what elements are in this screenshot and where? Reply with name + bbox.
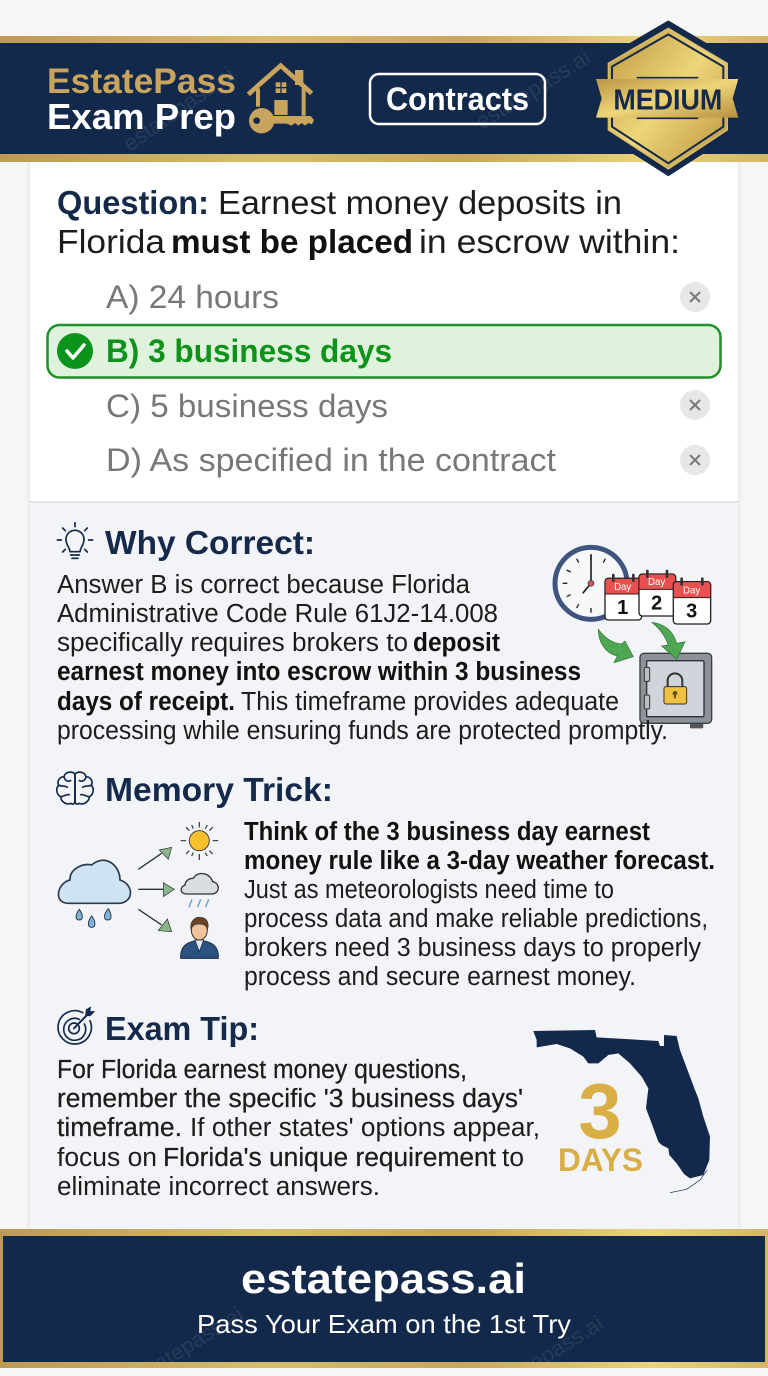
difficulty badge: MEDIUM [596,22,738,174]
question text [57,184,680,260]
icon: calendar day 3: 3 [686,600,697,622]
option C: C) 5 business days [106,388,388,424]
icon: calendar day 3: Day [683,585,700,596]
option A [106,279,710,315]
icon: calendar day 3 [673,579,711,624]
icon: businessman [181,917,218,958]
icon: brain [57,772,93,804]
text block: memory trick: Just as meteorologists need time to [244,876,614,904]
icon: calendar day 2: Day [648,577,665,588]
callout: 3 days [558,1067,643,1178]
icon: clock [555,547,627,619]
footer banner [0,1229,768,1376]
text block: why correct: processing while ensuring funds are protected promptly. [57,717,668,745]
text block: why correct: This timeframe provides adequate [241,688,619,716]
text block: why correct: days of receipt. [57,688,235,716]
text block: memory trick: money rule like a 3-day weather forecast. [244,847,715,875]
header banner: estatepass.ai [119,61,239,156]
text block: why correct: Administrative Code Rule 61J2-14.008 [57,600,498,628]
text block: exam tip: Florida's unique requirement [163,1144,496,1172]
text block: memory trick: process and secure earnest money. [244,963,636,991]
arrow: to person [138,909,172,932]
option D: D) As specified in the contract [106,442,556,478]
icon: calendar day 1 [605,575,642,620]
icon: sun [181,822,218,860]
icon: rain cloud [58,860,130,927]
icon: safe with padlock [640,653,712,728]
question text: in escrow within: [419,223,680,260]
arrow: to sun [138,847,172,869]
logo text: Exam Prep [47,96,236,137]
heading: Why Correct: Why Correct: [105,524,315,561]
question text: Florida [57,223,166,260]
icon: calendar day 2 [639,571,676,616]
text block: why correct: specifically requires brokers to [57,629,408,657]
illustration: clock, calendars and safe [555,547,712,728]
text block: why correct: earnest money into escrow within 3 business [57,658,581,686]
text block: exam tip: focus on [57,1144,157,1172]
callout: 3 days: 3 [578,1067,622,1155]
illustration: weather forecast [58,822,218,958]
category badge: Contracts [370,74,545,124]
text block: exam tip [57,1056,540,1201]
icon: calendar day 1: 1 [617,597,628,619]
map: Florida [533,1030,710,1193]
option C [106,388,710,424]
icon: small rain cloud [181,873,218,907]
header banner [0,36,768,162]
question text: must be placed [171,223,413,260]
arrow: day to safe left [598,629,633,663]
text block: why correct: Answer B is correct because Florida [57,571,471,599]
text block: why correct: deposit [413,629,500,657]
option B: correct answer [48,325,720,378]
text block: exam tip: If other states' options appear, [190,1114,540,1142]
footer tagline: Pass Your Exam on the 1st Try [197,1309,571,1339]
panel: content card [27,160,741,1230]
heading: Exam Tip: Exam Tip: [105,1010,259,1047]
arrow: to rain [138,883,174,897]
header banner: estatepass.ai [471,44,595,134]
text block: exam tip: timeframe. [57,1114,182,1142]
icon: house and key [248,66,314,133]
icon: calendar day 2: 2 [651,592,662,614]
text block: exam tip: remember the specific '3 business days' [57,1085,523,1113]
difficulty badge: MEDIUM: MEDIUM [613,84,722,116]
heading: Memory Trick: Memory Trick: [105,771,333,808]
question text: Earnest money deposits in [218,184,622,221]
text block: exam tip: For Florida earnest money questions, [57,1056,467,1084]
text block: memory trick: Think of the 3 business day earnest [244,818,650,846]
callout: 3 days: DAYS [558,1142,643,1178]
option B: correct answer: B) 3 business days [106,333,392,369]
logo text [47,62,236,137]
footer site name: estatepass.ai [241,1255,526,1302]
text block: memory trick [244,818,715,991]
logo text: EstatePass [47,62,236,101]
option A: A) 24 hours [106,279,279,315]
icon: light bulb [57,523,93,558]
text block: exam tip: eliminate incorrect answers. [57,1173,380,1201]
text block: memory trick: process data and make reliable predictions, [244,905,708,933]
category badge: Contracts: Contracts [386,81,529,117]
text block: why correct [57,571,668,745]
arrow: day to safe top [652,622,685,659]
question text: Question: [57,184,209,221]
icon: target with arrow [58,1008,93,1044]
text block: memory trick: brokers need 3 business days to properly [244,934,701,962]
text block: exam tip: to [502,1144,524,1172]
icon: calendar day 1: Day [614,582,631,593]
